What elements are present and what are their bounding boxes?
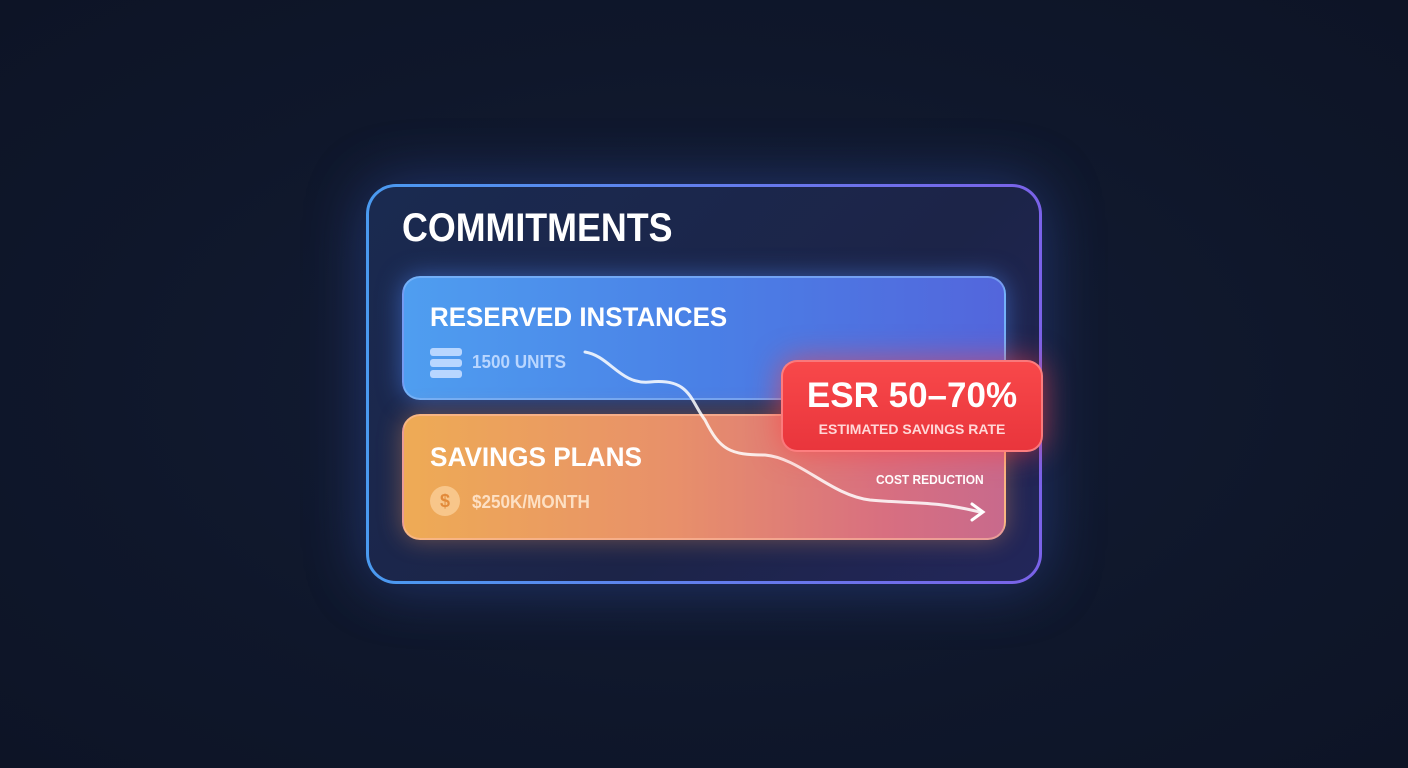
text: ESR value: ESR 50–70% [807,376,1017,415]
panel: savings plans [402,414,1006,540]
icon: dollar coin [430,486,460,516]
icon: server stack [430,348,462,378]
heading: reserved instances: RESERVED INSTANCES [430,302,727,332]
text: 250k/month: $250K/MONTH [472,492,590,512]
text: 1500 units: 1500 UNITS [472,352,566,372]
icon: dollar coin: $ [440,491,450,511]
panel: reserved instances [402,276,1006,400]
label: cost reduction: COST REDUCTION [876,472,984,487]
heading: savings plans: SAVINGS PLANS [430,442,642,472]
callout: ESR badge [781,360,1043,452]
title: COMMITMENTS [402,206,672,250]
text: estimated savings rate: ESTIMATED SAVINGS RATE [819,421,1005,437]
panel: commitments card [366,184,1042,584]
